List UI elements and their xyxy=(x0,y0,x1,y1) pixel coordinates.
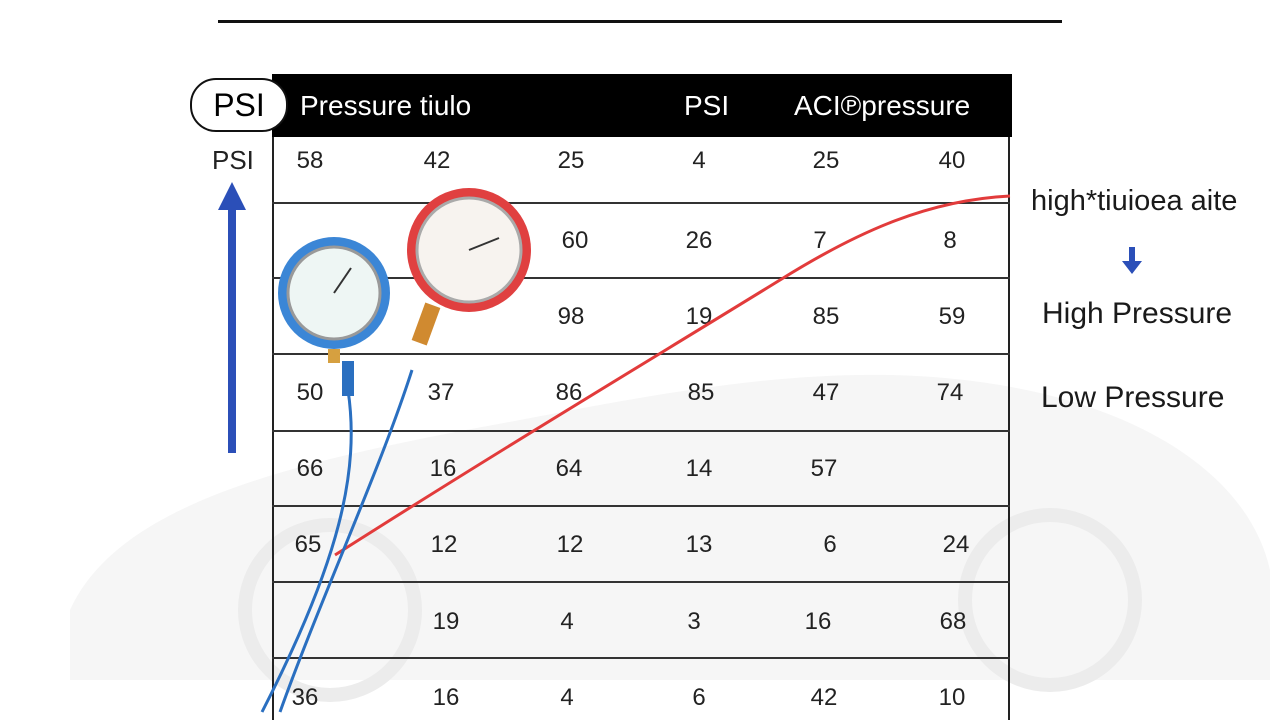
table values: 7 xyxy=(813,227,827,254)
table values: 19 xyxy=(686,303,712,330)
table values: 25 xyxy=(558,147,584,174)
icon: red gauge xyxy=(407,188,531,346)
right labels: High Pressure xyxy=(1042,297,1232,330)
table values: 3 xyxy=(687,608,701,635)
table values: 10 xyxy=(939,684,965,711)
table values: 6 xyxy=(823,531,837,558)
table values: 65 xyxy=(295,531,321,558)
table values: 58 xyxy=(297,147,323,174)
table values: 74 xyxy=(937,379,963,406)
table values: 68 xyxy=(940,608,966,635)
table values: 26 xyxy=(686,227,712,254)
table values: 86 xyxy=(556,379,582,406)
table values: 16 xyxy=(433,684,459,711)
table values: 66 xyxy=(297,455,323,482)
table values: 85 xyxy=(688,379,714,406)
table values: 19 xyxy=(433,608,459,635)
axis label: PSI xyxy=(212,145,254,175)
right labels: Low Pressure xyxy=(1041,381,1224,414)
table values: 59 xyxy=(939,303,965,330)
table values: 64 xyxy=(556,455,582,482)
table values: 98 xyxy=(558,303,584,330)
table values: 4 xyxy=(560,684,574,711)
top rule xyxy=(218,20,1062,23)
table values: 57 xyxy=(811,455,837,482)
table values: 4 xyxy=(560,608,574,635)
table values: 14 xyxy=(686,455,712,482)
table values: 50 xyxy=(297,379,323,406)
icon: down arrow xyxy=(1122,247,1142,274)
arrow: up xyxy=(218,182,246,453)
icon: blue gauge xyxy=(278,237,390,396)
right labels xyxy=(1031,185,1237,414)
table values: 8 xyxy=(943,227,957,254)
table values: 42 xyxy=(424,147,450,174)
table values: 25 xyxy=(813,147,839,174)
table values: 12 xyxy=(431,531,457,558)
table values: 42 xyxy=(811,684,837,711)
table values: 60 xyxy=(562,227,588,254)
PSI pill xyxy=(190,78,288,132)
table values: 37 xyxy=(428,379,454,406)
table values: 40 xyxy=(939,147,965,174)
table header xyxy=(272,74,1012,137)
table values: 85 xyxy=(813,303,839,330)
table values: 6 xyxy=(692,684,706,711)
table header: PSI xyxy=(684,90,729,121)
table values: 36 xyxy=(292,684,318,711)
table values: 13 xyxy=(686,531,712,558)
right labels: high*tiuioea aite xyxy=(1031,185,1237,217)
table xyxy=(272,74,1012,720)
table values: 24 xyxy=(943,531,969,558)
table header: ACI℗pressure xyxy=(794,90,970,121)
table values: 12 xyxy=(557,531,583,558)
table values: 4 xyxy=(692,147,706,174)
table values: 16 xyxy=(805,608,831,635)
table values: 47 xyxy=(813,379,839,406)
PSI pill: PSI xyxy=(213,87,265,123)
table header: Pressure tiulo xyxy=(300,90,471,121)
table values: 16 xyxy=(430,455,456,482)
